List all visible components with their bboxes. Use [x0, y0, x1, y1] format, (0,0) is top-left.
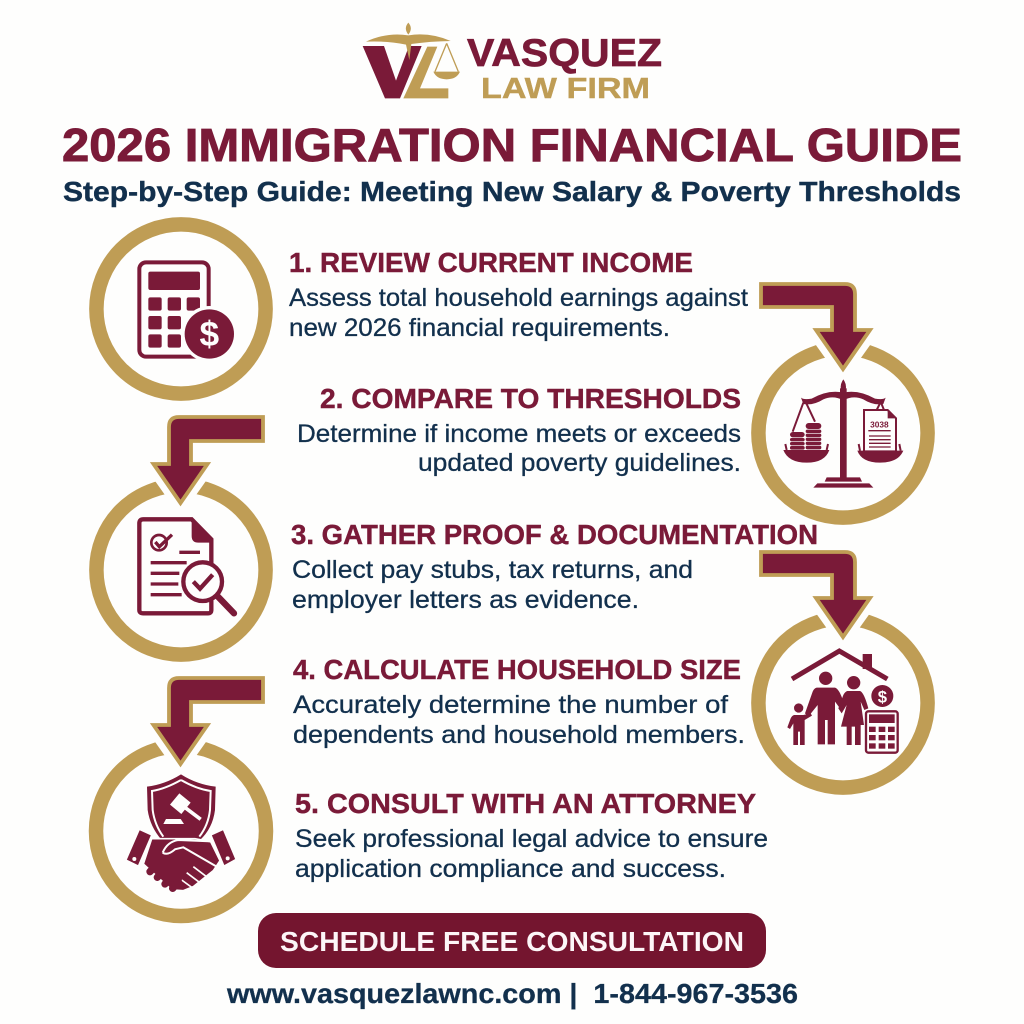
icon: calculator with dollar coin	[139, 262, 237, 362]
title: 2026 IMMIGRATION FINANCIAL GUIDE	[62, 119, 962, 171]
body: step 4: Accurately determine the number of	[293, 691, 728, 719]
ring 4	[758, 618, 928, 788]
ring 5	[96, 746, 266, 916]
body: step 1	[289, 284, 748, 342]
panel: step 1 text	[289, 247, 748, 342]
heading: step 2: 2. COMPARE TO THRESHOLDS	[320, 383, 741, 414]
body: step 2: Determine if income meets or exceeds	[297, 420, 741, 448]
button: schedule free consultation	[258, 913, 766, 968]
arrow: step 3 to step 4	[761, 552, 888, 651]
body: step 4: dependents and household members.	[293, 721, 745, 749]
body: step 3: employer letters as evidence.	[292, 586, 639, 614]
panel: step 5 text	[295, 788, 768, 883]
body: step 5	[295, 825, 768, 883]
icon: balance scales with coins and document	[783, 379, 903, 488]
body: step 2: updated poverty guidelines.	[418, 449, 741, 477]
panel: step 4 icon ring with family	[758, 552, 928, 788]
icon: family under roof with calculator	[787, 651, 898, 753]
logo wordmark: VASQUEZ: VASQUEZ	[467, 32, 662, 75]
icon: calculator with dollar coin: $	[200, 315, 220, 354]
icon: balance scales with coins and document: 3038	[870, 419, 889, 429]
heading: step 1: 1. REVIEW CURRENT INCOME	[289, 247, 693, 278]
arrow: step 2 to step 3	[136, 417, 263, 517]
body: step 3: Collect pay stubs, tax returns, and	[292, 556, 693, 584]
icon: family under roof with calculator: $	[878, 687, 888, 706]
button: schedule free consultation: SCHEDULE FREE CONSULTATION	[280, 926, 744, 957]
body: step 5: application compliance and success.	[295, 855, 726, 883]
heading: step 5: 5. CONSULT WITH AN ATTORNEY	[295, 788, 756, 819]
arrow: step 4 to step 5	[136, 678, 263, 778]
panel: step 3 text	[291, 519, 818, 614]
heading: step 3: 3. GATHER PROOF & DOCUMENTATION	[291, 519, 818, 550]
arrow: step 1 to step 2	[761, 284, 888, 383]
ring 2	[758, 348, 928, 518]
body: step 5: Seek professional legal advice to ensure	[295, 825, 768, 853]
body: step 4	[293, 691, 745, 749]
heading: step 4: 4. CALCULATE HOUSEHOLD SIZE	[293, 654, 741, 685]
logo wordmark: LAW FIRM: LAW FIRM	[481, 73, 650, 105]
panel: step 2 icon ring with scales	[758, 284, 928, 518]
panel: step 2 text	[297, 383, 741, 477]
logo mark: VL with scales	[363, 23, 460, 98]
body: step 3	[292, 556, 693, 614]
panel: step 5 icon ring with shield and handshake	[96, 678, 266, 916]
subtitle: Step-by-Step Guide: Meeting New Salary & Poverty Thresholds	[63, 176, 961, 207]
ring 3	[96, 485, 266, 655]
logo: Vasquez Law Firm	[363, 23, 662, 105]
panel: step 3 icon ring with document	[96, 417, 266, 655]
body: step 1: Assess total household earnings against	[289, 284, 748, 312]
icon: shield with gavel over handshake	[126, 774, 236, 891]
ring 1	[96, 224, 266, 394]
icon: document with magnifying glass	[139, 519, 234, 613]
footer contact line: www.vasquezlawnc.com | 1-844-967-3536	[226, 978, 798, 1009]
body: step 1: new 2026 financial requirements.	[289, 314, 670, 342]
panel: step 1 icon ring with calculator	[96, 224, 266, 394]
body: step 2	[297, 420, 741, 477]
panel: step 4 text	[293, 654, 745, 749]
